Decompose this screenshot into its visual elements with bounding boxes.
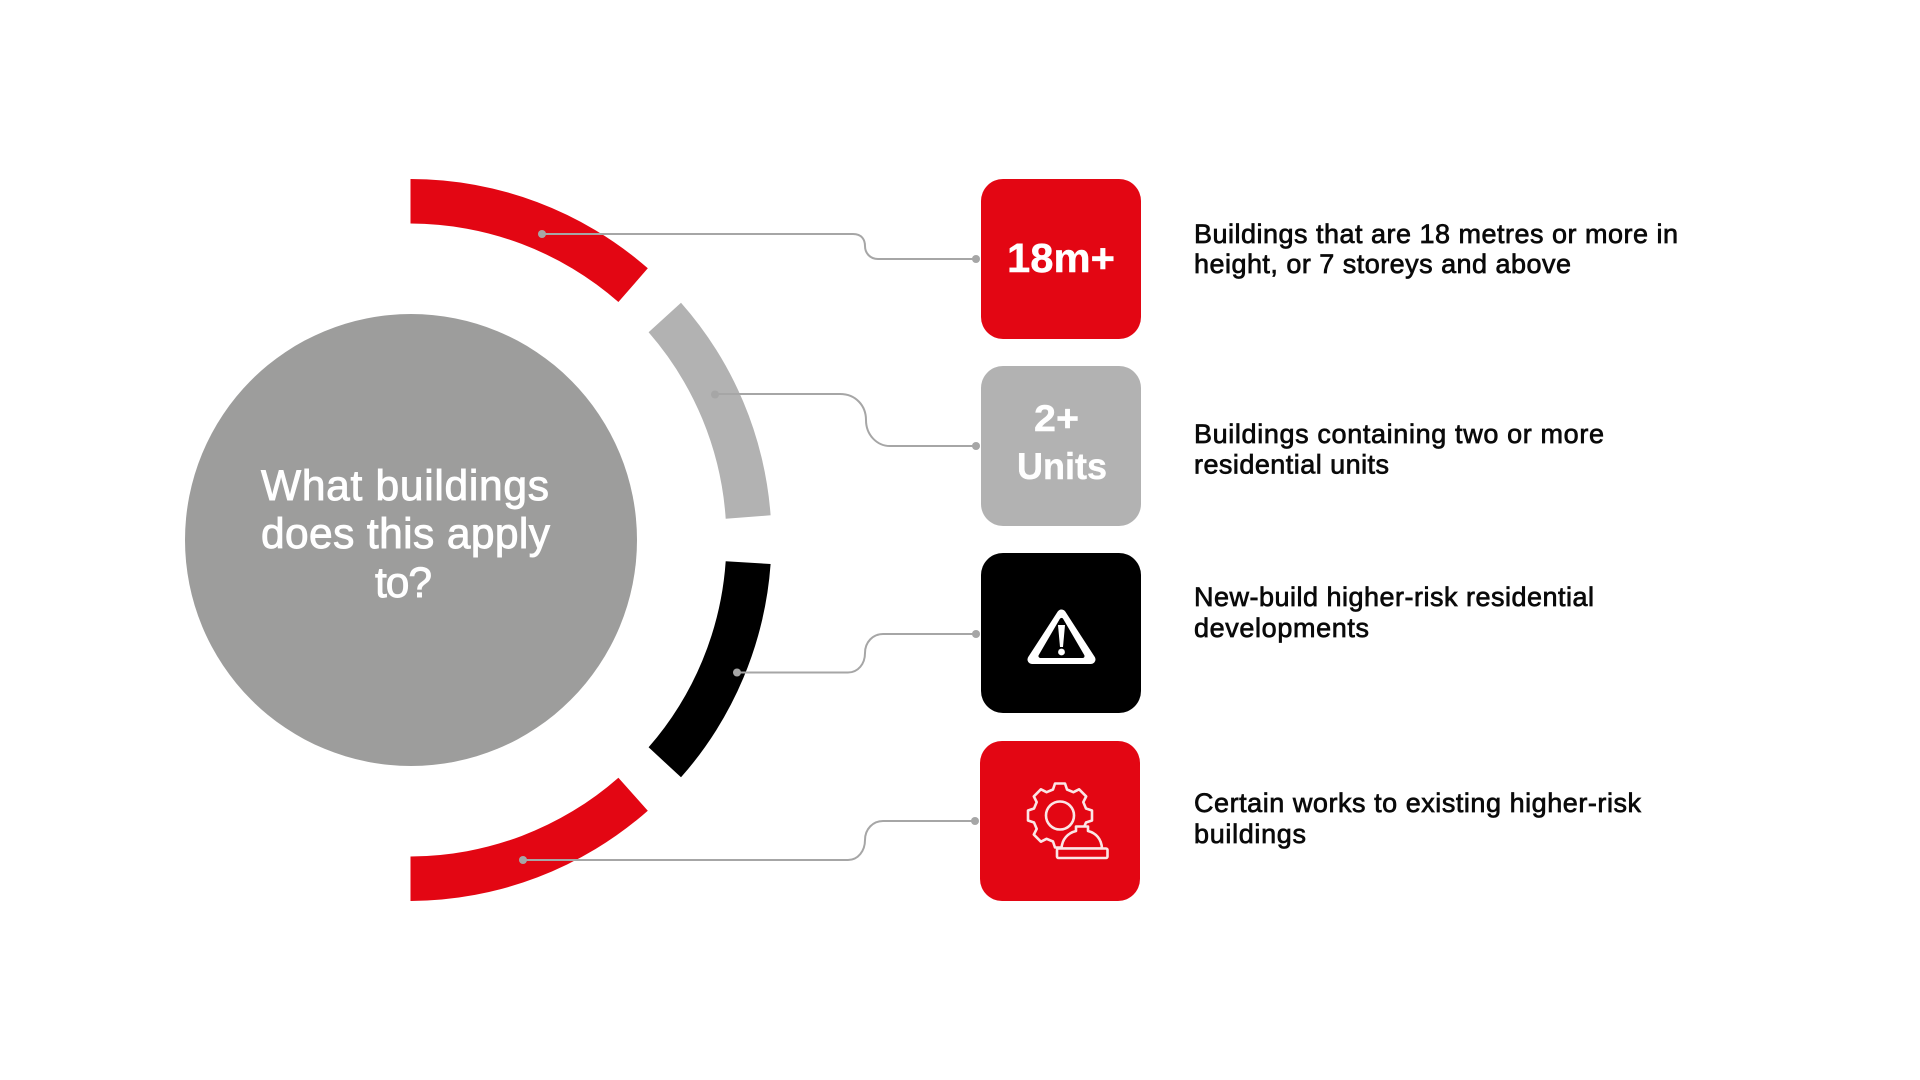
tile: warning icon [981, 553, 1141, 713]
text: existing works criterion: buildings [1194, 819, 1306, 849]
text: two or more units criterion [1194, 419, 1604, 480]
connector: grey arc to 2+ units [711, 390, 980, 450]
tile: 2+ units: Units [1017, 446, 1107, 487]
icon: gear and hard hat [1028, 784, 1108, 858]
central circle with question: to? [375, 560, 432, 607]
text: new-build criterion: New-build higher-risk residential [1194, 582, 1594, 612]
connector: top red arc to 18m+ [538, 230, 980, 263]
text: new-build criterion: developments [1194, 613, 1369, 643]
central circle with question: What buildings [261, 463, 549, 510]
arc: grey segment [649, 303, 771, 519]
connector: bottom red arc to gear icon [519, 817, 979, 864]
icon: warning triangle [1032, 614, 1091, 660]
text: existing works criterion: Certain works to existing higher-risk [1194, 788, 1642, 818]
text: 18 metres criterion: Buildings that are 18 metres or more in [1194, 219, 1678, 249]
text: two or more units criterion: residential units [1194, 450, 1389, 480]
text: 18 metres criterion: height, or 7 storeys and above [1194, 249, 1571, 279]
central circle with question [185, 314, 637, 766]
central circle with question: does this apply [261, 511, 551, 558]
connector: black arc to warning icon [733, 630, 980, 676]
tile: gear and hard hat icon [980, 741, 1140, 901]
tile: 18m+: 18m+ [1007, 235, 1115, 281]
arc: black segment [649, 561, 771, 777]
text: new-build criterion [1194, 582, 1594, 643]
text: existing works criterion [1194, 788, 1642, 849]
arc: top red segment [410, 179, 648, 302]
tile: 18m+ [981, 179, 1141, 339]
text: two or more units criterion: Buildings containing two or more [1194, 419, 1604, 449]
text: 18 metres criterion [1194, 219, 1678, 279]
tile: 2+ units [981, 366, 1141, 526]
tile: 2+ units: 2+ [1034, 398, 1079, 439]
arc: bottom red segment [410, 778, 648, 901]
